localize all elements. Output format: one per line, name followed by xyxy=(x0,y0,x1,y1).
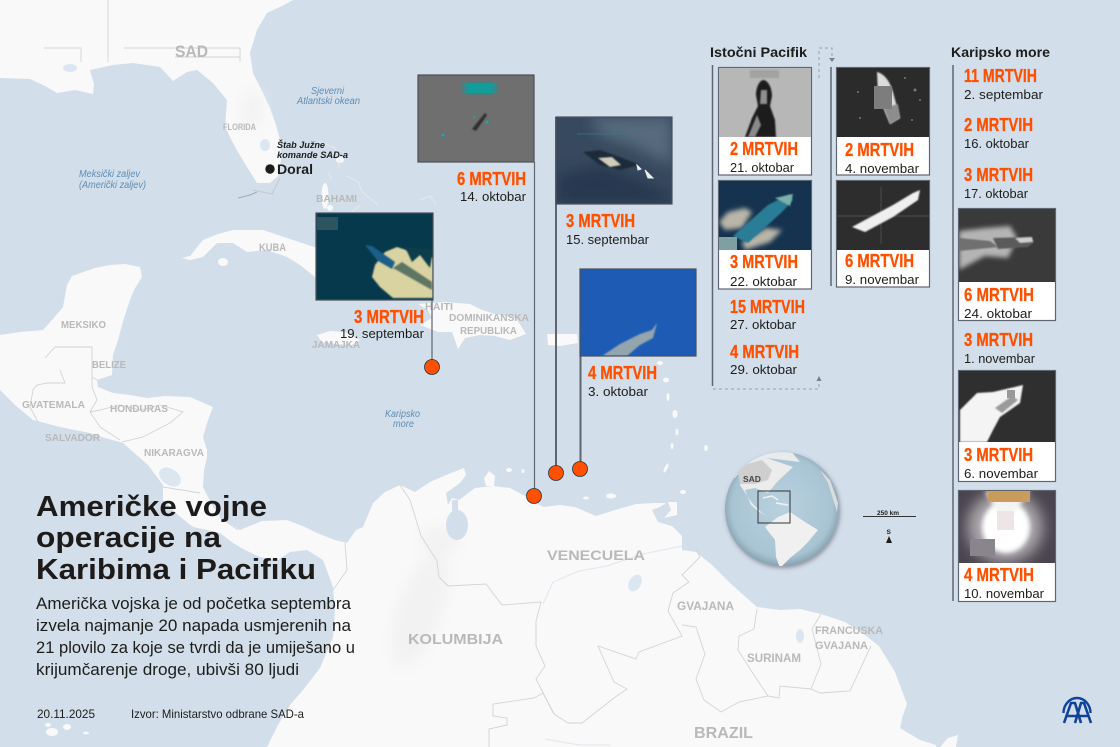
entry: 27 October xyxy=(730,297,805,332)
map labels: JAMAJKA xyxy=(312,339,360,351)
location markers xyxy=(424,360,588,504)
scale bar and north arrow xyxy=(863,510,916,543)
entry: 16 October: 16. oktobar xyxy=(964,136,1030,151)
caption: 14 October: 14. oktobar xyxy=(460,189,527,204)
caption: 14 October: 6 MRTVIH xyxy=(457,169,526,189)
map labels: (Američki zaljev) xyxy=(79,180,146,191)
inset globe locator xyxy=(725,450,839,568)
card: 4 November: 2 MRTVIH xyxy=(845,140,914,160)
map: Bahamas and Florida keys outlines xyxy=(238,141,436,212)
entry: 27 October: 15 MRTVIH xyxy=(730,297,805,317)
card: 24 October: 6 MRTVIH xyxy=(964,285,1034,305)
map: terrain shading xyxy=(242,90,461,674)
entry: 2 September: 2. septembar xyxy=(964,87,1044,102)
entry: 16 October: 2 MRTVIH xyxy=(964,115,1033,135)
caption: 15 September: 15. septembar xyxy=(566,232,650,247)
card: 4 November xyxy=(836,68,930,176)
photo: strike 3 October xyxy=(580,269,696,356)
caption: 3 October: 4 MRTVIH xyxy=(588,363,657,383)
callout: Doral headquarters: Doral xyxy=(277,161,313,177)
heading: Caribbean Sea: Karipsko more xyxy=(951,44,1050,60)
title: operacije na xyxy=(36,522,222,554)
callout: Doral headquarters xyxy=(265,139,348,177)
entry: 16 October xyxy=(964,115,1033,151)
map labels: GVAJANA xyxy=(677,601,734,613)
caption: 15 September: 3 MRTVIH xyxy=(566,211,635,231)
entry: 17 October: 3 MRTVIH xyxy=(964,165,1033,185)
map labels: KOLUMBIJA xyxy=(408,631,503,648)
footer: source: Izvor: Ministarstvo odbrane SAD-a xyxy=(131,707,304,721)
intro text: 21 plovilo za koje se tvrdi da je umiješano u xyxy=(36,639,355,657)
map labels: Meksički zaljev xyxy=(79,169,141,180)
map labels: HONDURAS xyxy=(110,403,168,415)
footer: date: 20.11.2025 xyxy=(37,707,95,721)
photo: strike 15 September xyxy=(556,117,672,204)
map labels: FRANCUSKA xyxy=(815,625,883,637)
card: 6 November xyxy=(958,370,1056,482)
card: 21 October: 21. oktobar xyxy=(730,160,795,175)
title xyxy=(36,491,316,586)
logo: Anadolu Agency xyxy=(1064,698,1091,723)
caption: 3 October: 3. oktobar xyxy=(588,384,649,399)
map labels: Karipsko xyxy=(385,409,420,420)
map labels: MEKSIKO xyxy=(61,319,106,331)
leader lines from map points xyxy=(432,117,580,496)
scale bar and north arrow: S xyxy=(886,529,892,536)
callout: Doral headquarters: komande SAD-a xyxy=(277,150,348,161)
map labels xyxy=(22,42,883,742)
map labels: BAHAMI xyxy=(316,193,357,205)
intro text: Američka vojska je od početka septembra xyxy=(36,595,352,613)
entry: 29 October: 29. oktobar xyxy=(730,362,798,377)
map: country borders xyxy=(30,0,871,747)
card: 4 November: 4. novembar xyxy=(845,161,920,176)
map labels: BELIZE xyxy=(92,359,126,371)
map labels: DOMINIKANSKA xyxy=(449,312,529,324)
map labels: SAD xyxy=(175,42,208,61)
card: 6 November: 6. novembar xyxy=(964,466,1039,481)
caption: 19 September: 19. septembar xyxy=(340,326,425,341)
card: 6 November: 3 MRTVIH xyxy=(964,445,1033,465)
card: 10 November: 10. novembar xyxy=(964,586,1045,601)
callout: Doral headquarters: Štab Južne xyxy=(277,139,326,151)
card: 9 November xyxy=(836,180,930,287)
map labels: GVAJANA xyxy=(815,640,868,652)
caption: 3 October xyxy=(588,363,657,399)
caption: 15 September xyxy=(566,211,650,247)
intro text: krijumčarenje droge, ubivši 80 ljudi xyxy=(36,661,299,679)
card: 22 October: 22. oktobar xyxy=(730,274,798,289)
card: 22 October: 3 MRTVIH xyxy=(730,252,798,272)
panel: Caribbean Sea column xyxy=(958,66,1056,602)
map labels: KUBA xyxy=(259,242,286,254)
entry: 27 October: 27. oktobar xyxy=(730,317,797,332)
title: Američke vojne xyxy=(36,491,267,523)
map labels: SURINAM xyxy=(747,653,801,665)
entry: 1 November: 3 MRTVIH xyxy=(964,330,1033,350)
map labels: FLORIDA xyxy=(223,122,256,132)
panel: Eastern Pacific column 1 xyxy=(718,68,812,377)
card: 24 October xyxy=(958,208,1056,321)
timeline rules and dashed connectors xyxy=(712,48,953,601)
map labels: SALVADOR xyxy=(45,432,100,444)
entry: 2 September xyxy=(964,66,1044,102)
card: 10 November: 4 MRTVIH xyxy=(964,565,1034,585)
map labels: more xyxy=(393,419,414,430)
card: 21 October: 2 MRTVIH xyxy=(730,139,798,159)
photo: strike 19 September xyxy=(316,213,433,300)
entry: 2 September: 11 MRTVIH xyxy=(964,66,1037,86)
map labels: Sjeverni xyxy=(311,86,345,97)
map labels: REPUBLIKA xyxy=(460,325,517,337)
caption: 19 September: 3 MRTVIH xyxy=(354,307,424,327)
inset globe locator: SAD xyxy=(743,474,761,484)
entry: 1 November xyxy=(964,330,1036,366)
map labels: VENECUELA xyxy=(547,547,645,563)
map labels: BRAZIL xyxy=(694,725,753,742)
intro text xyxy=(36,595,355,679)
heading: Eastern Pacific: Istočni Pacifik xyxy=(710,44,807,60)
card: 9 November: 6 MRTVIH xyxy=(845,251,914,271)
entry: 1 November: 1. novembar xyxy=(964,351,1036,366)
map labels: GVATEMALA xyxy=(22,399,85,411)
card: 22 October xyxy=(718,180,812,289)
title: Karibima i Pacifiku xyxy=(36,554,316,586)
caption: 19 September xyxy=(340,307,425,341)
card: 21 October xyxy=(718,68,812,175)
card: 24 October: 24. oktobar xyxy=(964,306,1033,321)
card: 10 November xyxy=(958,490,1056,602)
entry: 29 October xyxy=(730,342,799,377)
panel: Eastern Pacific column 2 xyxy=(836,68,930,287)
card: 9 November: 9. novembar xyxy=(845,272,920,287)
caption: 14 October xyxy=(457,169,527,204)
entry: 29 October: 4 MRTVIH xyxy=(730,342,799,362)
scale bar and north arrow: 250 km xyxy=(877,510,899,517)
entry: 17 October: 17. oktobar xyxy=(964,186,1029,201)
map labels: Atlantski okean xyxy=(296,96,360,107)
intro text: izvela najmanje 20 napada usmjerenih na xyxy=(36,617,352,635)
map labels: NIKARAGVA xyxy=(144,447,204,459)
photo: strike 14 October xyxy=(418,75,534,162)
map: lakes and gulf water xyxy=(63,64,804,745)
map labels: HAITI xyxy=(425,301,453,313)
entry: 17 October xyxy=(964,165,1033,201)
